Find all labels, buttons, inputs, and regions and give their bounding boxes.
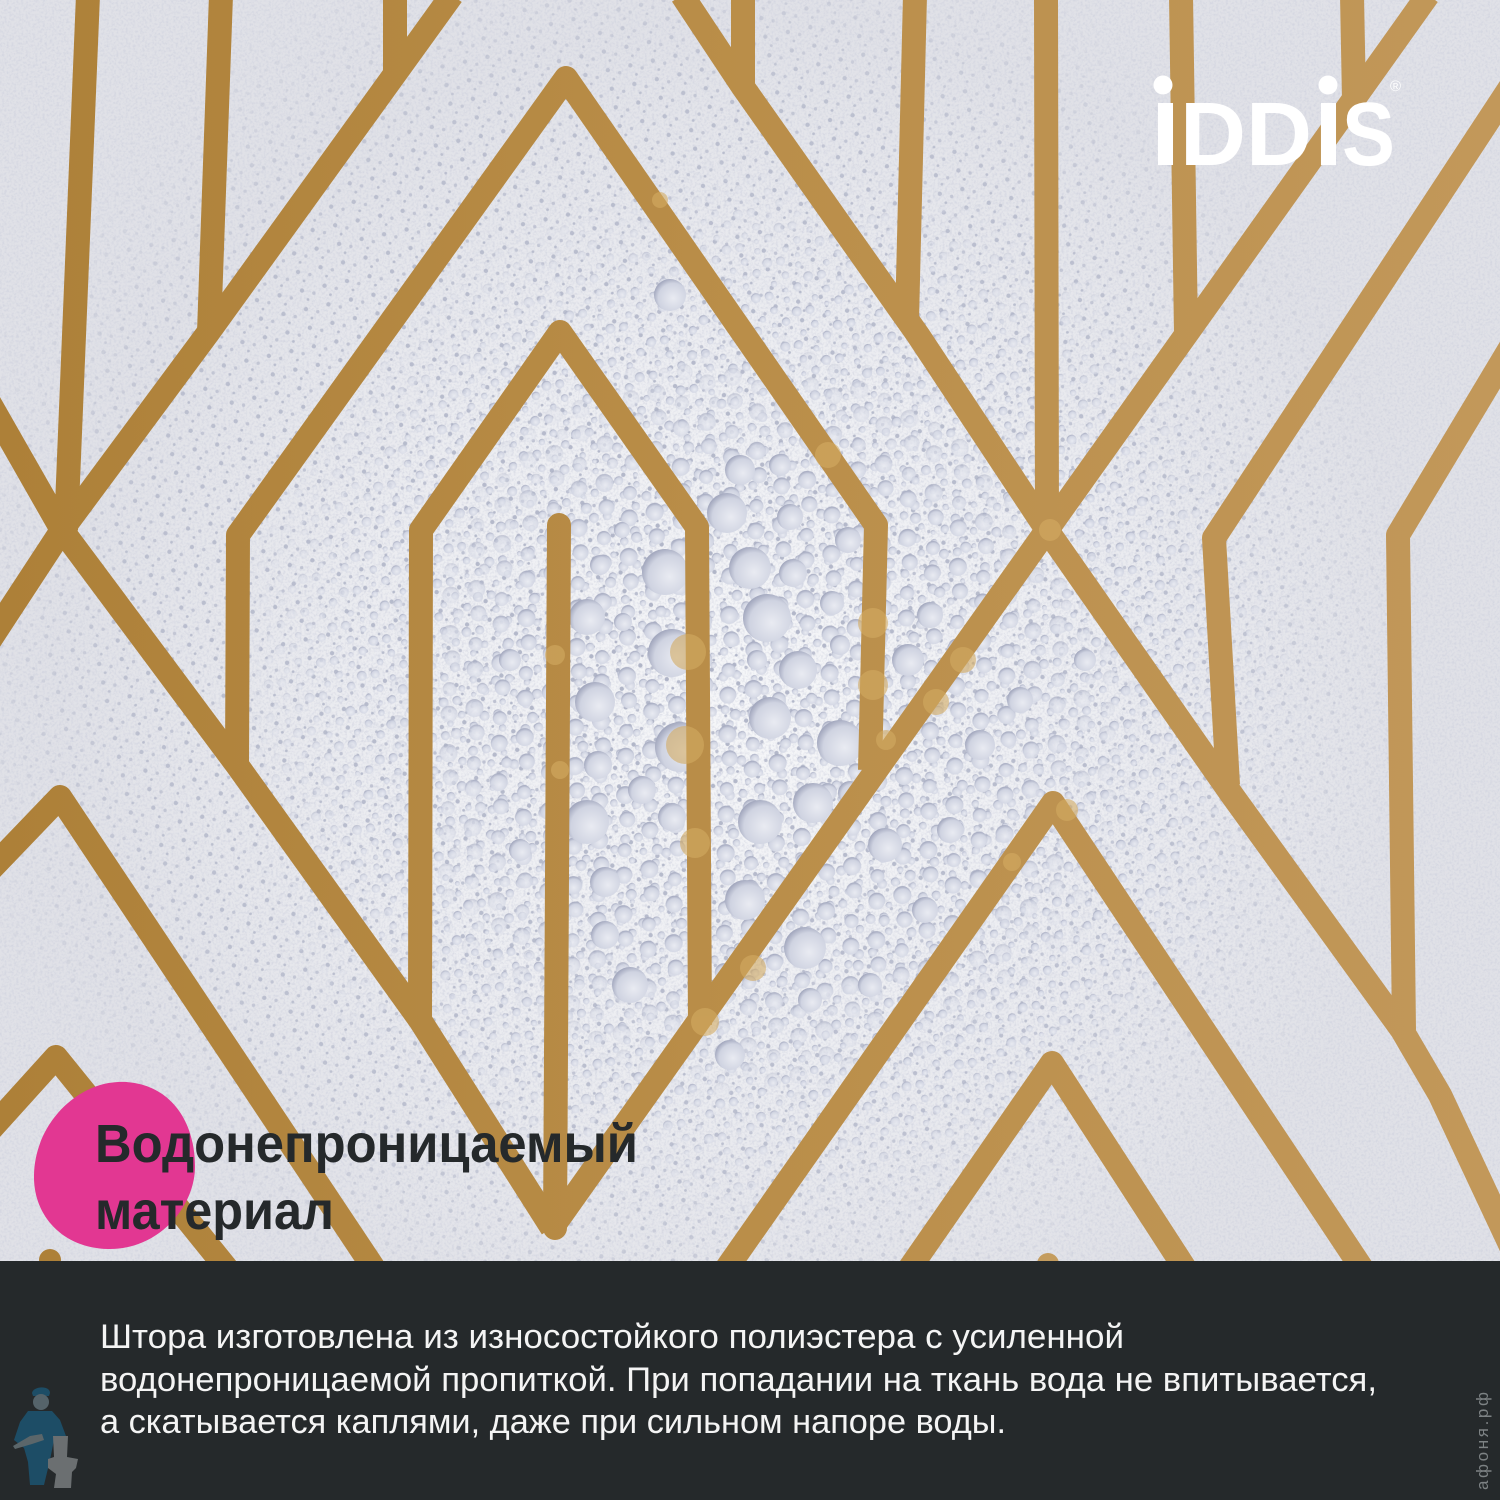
icon: plumber with toilet xyxy=(13,1387,78,1488)
dark description band xyxy=(0,1261,1500,1500)
lower chevrons xyxy=(722,803,1363,1275)
logo: IDDIS: D xyxy=(1180,85,1246,185)
large rising diagonal xyxy=(552,0,1428,1228)
inner chevron xyxy=(420,332,700,1025)
pink blob accent xyxy=(34,1082,195,1249)
descending diagonal through centre xyxy=(682,0,1500,1255)
inner bar xyxy=(555,525,559,1228)
main chevron xyxy=(237,78,876,770)
droplets on gold lines xyxy=(545,192,1078,1036)
description text: а скатывается каплями, даже при сильном напоре воды. xyxy=(100,1403,1006,1441)
logo: IDDIS xyxy=(1151,76,1401,185)
description text: Штора изготовлена из износостойкого полиэстера с усиленной xyxy=(100,1318,1124,1356)
description text: водонепроницаемой пропиткой. При попадании на ткань вода не впитывается, xyxy=(100,1361,1377,1399)
watermark: афоня.рф xyxy=(1473,1392,1492,1490)
heading xyxy=(95,1114,638,1241)
logo: IDDIS: I xyxy=(1151,85,1180,185)
right chevrons xyxy=(1214,80,1500,785)
logo: IDDIS: D xyxy=(1246,85,1312,185)
logo: IDDIS: S xyxy=(1342,85,1395,185)
description text xyxy=(100,1318,1377,1441)
heading: Водонепроницаемый xyxy=(95,1114,638,1174)
left X and upper-left lines xyxy=(66,0,88,530)
logo: IDDIS: ® xyxy=(1390,78,1401,95)
logo: IDDIS: I xyxy=(1314,85,1343,185)
heading: материал xyxy=(95,1181,334,1241)
